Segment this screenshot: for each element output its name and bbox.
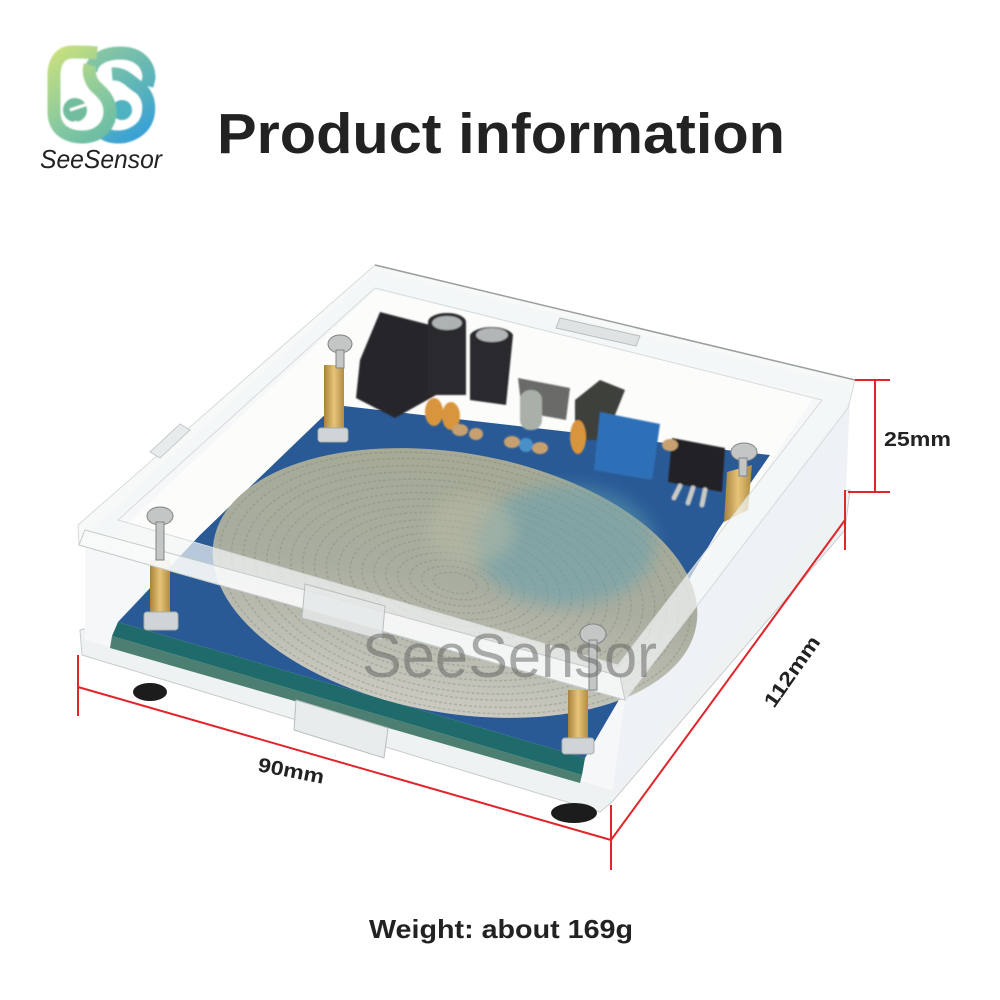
front tab xyxy=(302,584,385,640)
rubber feet xyxy=(133,683,597,823)
top acrylic frame xyxy=(78,265,855,758)
screws xyxy=(147,335,757,690)
hex nuts xyxy=(144,428,594,754)
back edge xyxy=(375,265,855,380)
board edge xyxy=(112,622,585,775)
dimension: 112mm xyxy=(611,490,845,840)
back tab xyxy=(556,318,640,346)
DC jack xyxy=(356,312,445,418)
spiral coil xyxy=(191,412,719,754)
watermark: SeeSensor xyxy=(362,622,657,691)
product photo: acrylic case with coil board xyxy=(78,265,855,823)
dimension: 25mm: 25mm xyxy=(884,429,951,451)
right side wall xyxy=(612,400,850,795)
dimension: 90mm xyxy=(78,655,611,870)
logo mark xyxy=(54,52,149,137)
acrylic side walls xyxy=(85,270,850,790)
logo: SeeSensor xyxy=(40,52,163,174)
weight note: Weight: about 169g xyxy=(369,914,633,944)
dimension: 112mm: 112mm xyxy=(760,632,825,712)
resistors xyxy=(452,424,678,454)
reflection: light ring on coil xyxy=(425,495,515,565)
blue trimmer xyxy=(594,412,660,480)
dimension: 25mm xyxy=(848,380,951,492)
left tab xyxy=(150,424,190,458)
logo wordmark: SeeSensor xyxy=(40,144,163,174)
front edge highlight xyxy=(79,530,625,700)
dimension: 90mm: 90mm xyxy=(256,754,326,789)
black regulator IC xyxy=(668,438,725,492)
brass standoffs xyxy=(150,365,752,740)
component cluster: connector and capacitors xyxy=(356,312,725,505)
reflection on coil xyxy=(475,485,655,605)
regulator pins xyxy=(674,486,705,505)
capacitor right xyxy=(470,327,513,405)
title: Product information xyxy=(217,102,785,166)
circuit board xyxy=(118,405,770,758)
transistor xyxy=(518,378,570,420)
dark regulator xyxy=(575,380,625,440)
tantalum capacitors xyxy=(425,398,586,454)
LED xyxy=(520,390,542,430)
lower front tab xyxy=(294,700,388,758)
bottom acrylic plate xyxy=(80,490,850,812)
capacitor left xyxy=(428,313,466,395)
